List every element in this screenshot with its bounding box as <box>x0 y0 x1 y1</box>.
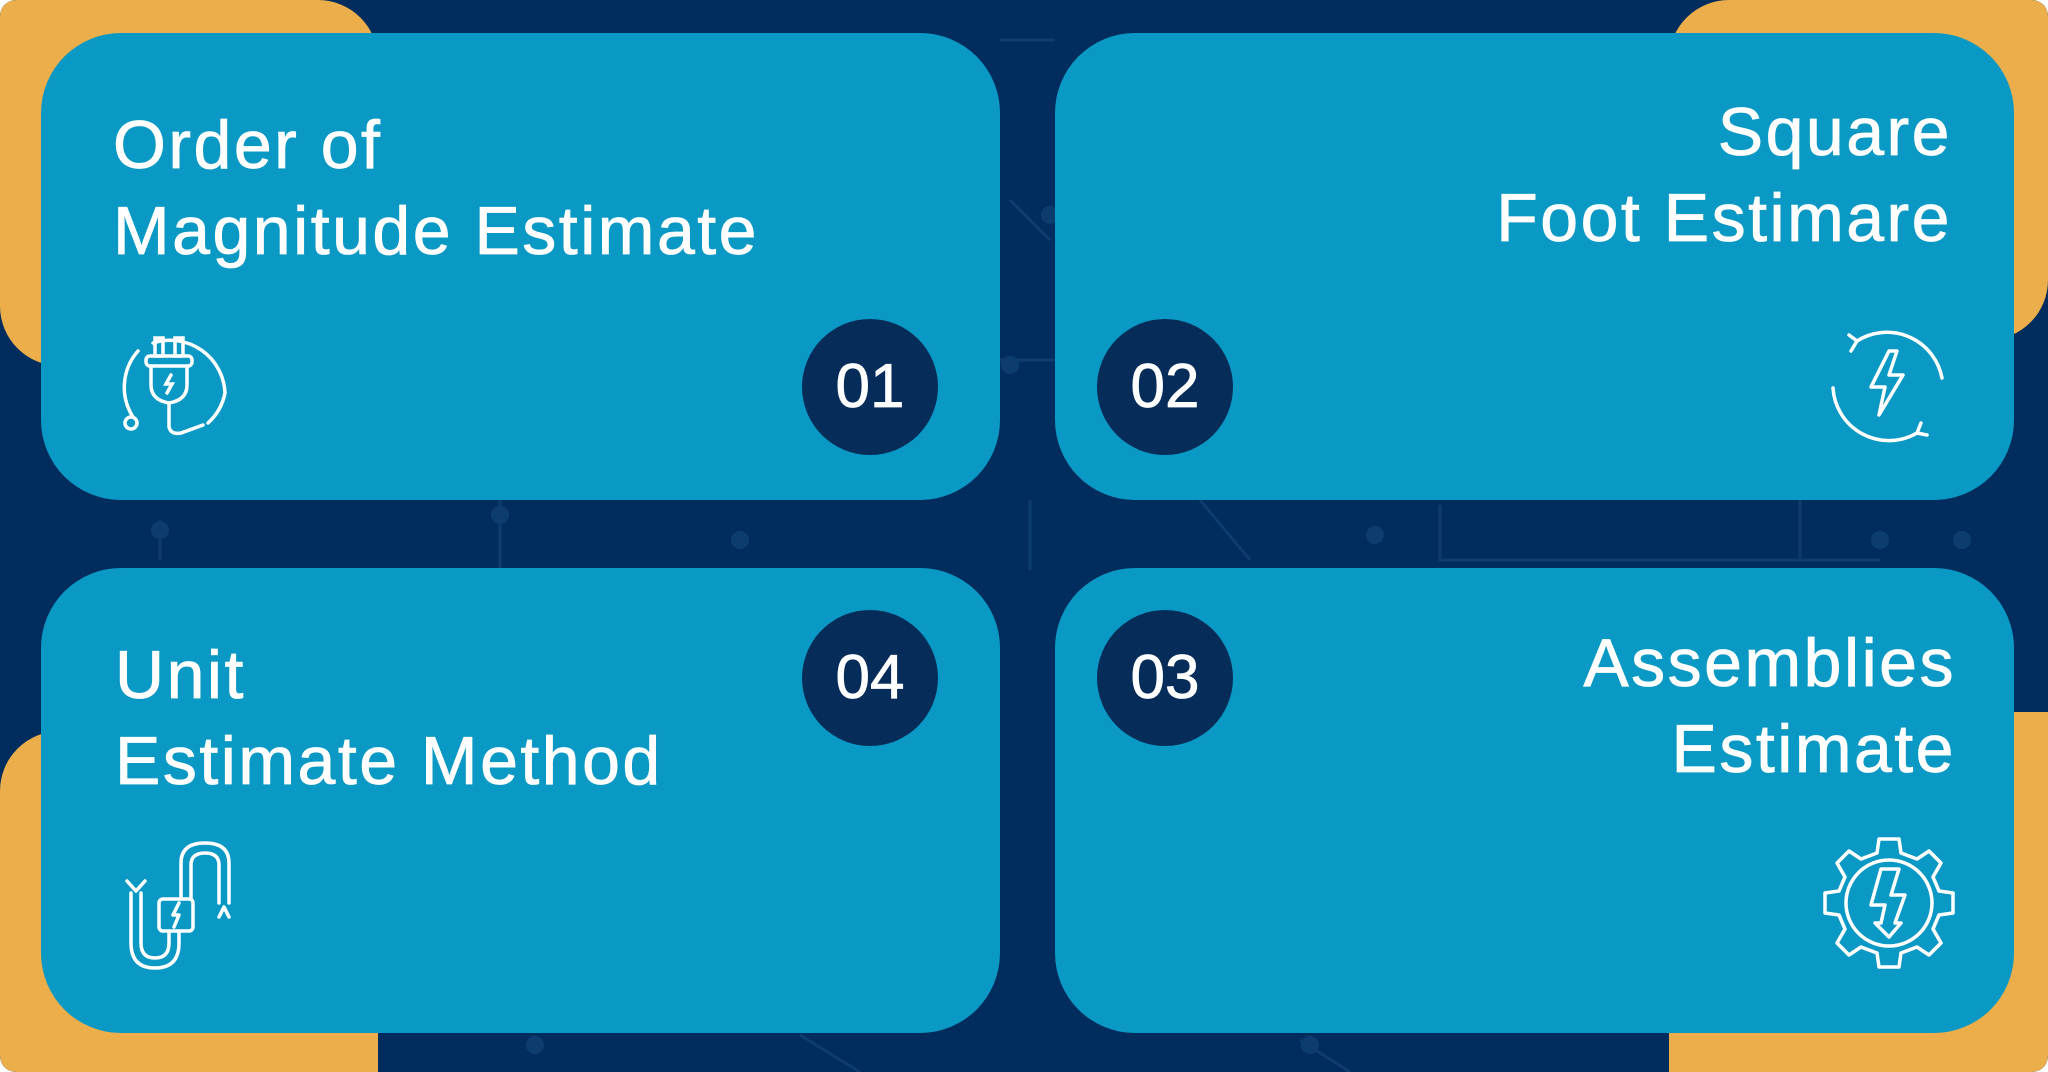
number badge 03: 03 <box>1131 643 1199 712</box>
heading: Square Foot Estimare <box>1496 94 1952 256</box>
panel: card 04 <box>41 568 1000 1033</box>
orange corner blocks <box>0 0 378 366</box>
number badge 04: 04 <box>836 643 904 712</box>
icon: gear lightning <box>1823 837 1955 969</box>
heading: Assemblies Estimate: Assemblies <box>1583 625 1956 701</box>
icon: cycle lightning <box>1831 330 1944 442</box>
heading: Square Foot Estimare: Foot Estimare <box>1496 180 1952 256</box>
heading: Order of Magnitude Estimate <box>113 107 759 269</box>
number badge 01 <box>802 319 938 455</box>
heading: Square Foot Estimare: Square <box>1718 94 1952 170</box>
panel: card 03 <box>1055 568 2014 1033</box>
icon: plug <box>122 336 227 436</box>
number badge 02 <box>1097 319 1233 455</box>
icon: cable <box>125 841 231 970</box>
number badge 01: 01 <box>836 352 904 421</box>
number badge 04 <box>802 610 938 746</box>
heading: Order of Magnitude Estimate: Order of <box>113 107 382 183</box>
number badge 03 <box>1097 610 1233 746</box>
heading: Assemblies Estimate: Estimate <box>1671 711 1956 787</box>
number badge 02: 02 <box>1131 352 1199 421</box>
panel: card 02 <box>1055 33 2014 500</box>
heading: Unit Estimate Method: Estimate Method <box>115 723 663 799</box>
heading: Assemblies Estimate <box>1582 625 1956 787</box>
heading: Unit Estimate Method: Unit <box>115 637 246 713</box>
panel: card 01 <box>41 33 1000 500</box>
heading: Unit Estimate Method <box>115 637 663 799</box>
heading: Order of Magnitude Estimate: Magnitude Estimate <box>113 193 759 269</box>
